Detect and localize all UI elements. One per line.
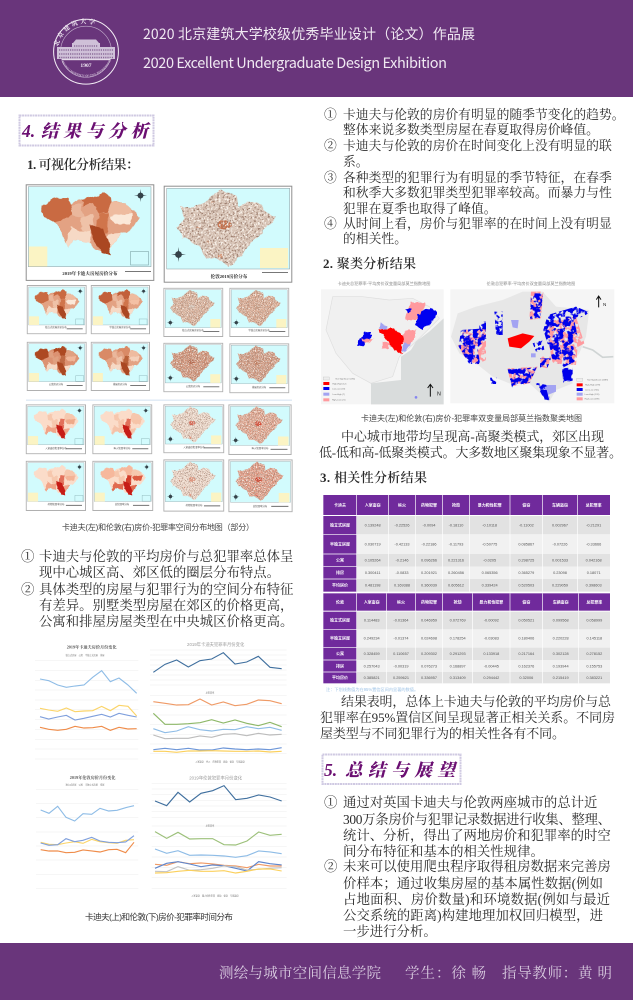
legend: London clusters xyxy=(577,378,608,401)
table: Cardiff correlation: 0.481198 xyxy=(365,584,381,588)
map grid: Cardiff crime rates xyxy=(26,405,153,510)
table: Cardiff correlation: 独立式房屋 xyxy=(330,521,350,527)
table: Cardiff correlation: 入室盗窃 xyxy=(365,501,381,507)
footer: advisor: 指导教师：黄 明 xyxy=(502,964,612,982)
table: London correlation: -0.01364 xyxy=(393,619,409,623)
table: London correlation: 入室盗窃 xyxy=(364,598,380,604)
text block: spatial findings: 有差异。别墅类型房屋在郊区的价格更高， xyxy=(39,597,293,614)
table: London correlation: 抢劫 xyxy=(454,598,462,604)
icon: north arrow xyxy=(596,296,606,307)
chart: London monthly house price: 独立式房屋 公寓 半独立式房屋 排屋 xyxy=(66,782,105,786)
table: London correlation: 0.099568 xyxy=(553,619,569,623)
table: London correlation: 总犯罪率 xyxy=(586,598,602,604)
legend: London clusters: High-High (199) xyxy=(585,385,601,387)
line charts: time distribution xyxy=(35,641,287,897)
table: London correlation: 车辆盗窃 xyxy=(553,598,569,604)
text block: temporal findings: 从时间上看，房价与犯罪率的在时间上没有明显 xyxy=(343,216,612,232)
table: London correlation: 0.133918 xyxy=(483,652,499,656)
table: London correlation: 0.217164 xyxy=(518,652,535,656)
table: London correlation: -0.00319 xyxy=(393,664,409,668)
text block: conclusion: 间分布特征和基本的相关性规律。 xyxy=(343,843,544,859)
text block: temporal findings: ④ xyxy=(324,217,337,231)
table: Cardiff correlation: 0.605612 xyxy=(448,584,464,588)
table: Cardiff correlation: 0.260456 xyxy=(448,571,464,575)
chart: Cardiff monthly crime rate xyxy=(150,641,287,763)
table: London correlation: 0.385821 xyxy=(364,676,380,680)
icon: north arrow: N xyxy=(603,302,606,307)
icon: north arrow: N xyxy=(437,391,441,397)
table: London correlation xyxy=(323,593,610,683)
table: London correlation: 0.076273 xyxy=(421,664,437,668)
map grid: Cardiff house prices by type: 半独立房屋房价分布 xyxy=(109,325,131,329)
table: London correlation: 半独立房屋 xyxy=(330,635,350,641)
table: London correlation: 0.215419 xyxy=(553,676,569,680)
text block: correlation findings: 屋类型与不同犯罪行为的相关性各有不同。 xyxy=(320,726,565,741)
table: London correlation: 偷窃 xyxy=(522,598,530,604)
icon: university seal: 1907 xyxy=(80,63,92,69)
table: Cardiff correlation: 公寓 xyxy=(336,557,344,563)
table: Cardiff correlation: 0.365279 xyxy=(518,571,534,575)
table: Cardiff correlation: 0.001533 xyxy=(552,559,568,563)
table: London correlation: 0.220228 xyxy=(553,637,569,641)
legend: Cardiff clusters: High-High (12) xyxy=(332,383,347,385)
table: Cardiff correlation: -0.50775 xyxy=(482,542,497,546)
table: London correlation: 0.259621 xyxy=(393,676,409,680)
legend: London clusters: Not Significant (3489) xyxy=(587,379,608,382)
text block: conclusion: 占地面积、房价数量)和环境数据(例如与最近 xyxy=(343,891,610,907)
table: London correlation: 0.180406 xyxy=(518,637,534,641)
icon: university seal xyxy=(53,18,119,85)
text block: conclusion: 统计、分析，得出了两地房价和犯罪率的时空 xyxy=(343,827,611,844)
table: London correlation: 0.249234 xyxy=(364,637,381,641)
legend: London clusters: High-Low (289) xyxy=(585,399,600,401)
text block: temporal findings: 犯罪在夏季也取得了峰值。 xyxy=(343,201,497,216)
text block: conclusion: 公交系统的距离)构建地理加权回归模型，进 xyxy=(343,907,603,924)
table: London correlation: 0.294442 xyxy=(483,676,499,680)
table: Cardiff correlation: -0.33666 xyxy=(586,542,601,546)
table: Cardiff correlation: 0.169388 xyxy=(394,584,410,588)
table: London correlation: 0.168897 xyxy=(450,664,466,668)
table: London correlation: 0.046959 xyxy=(421,619,437,623)
map grid: London crime rates: 入室盗窃犯罪率分布 xyxy=(183,445,205,449)
chart: London monthly crime rate xyxy=(152,774,287,897)
icon: university seal: 北京建筑大学 xyxy=(54,18,96,46)
legend: Cardiff clusters: High-Low (21) xyxy=(332,400,346,402)
table: London correlation: 0.257043 xyxy=(364,664,380,668)
map: Cardiff LISA clusters: 卡迪夫总犯罪率-平均房价双变量局部莫兰指数地图 xyxy=(338,280,430,286)
header title Chinese: 2020 北京建筑大学校级优秀毕业设计（论文）作品展 xyxy=(143,24,475,44)
text block: cluster findings: 低-低和高-低聚类模式。大多数地区聚集现象不显著。 xyxy=(319,445,622,460)
table: London correlation: 药物犯罪 xyxy=(421,598,437,604)
table: London correlation: 0.209302 xyxy=(421,652,437,656)
footer: student: 学生：徐 畅 xyxy=(405,965,486,982)
text block: spatial findings: 现中心城区高、郊区低的圈层分布特点。 xyxy=(39,564,280,580)
table: Cardiff correlation: 0.339424 xyxy=(482,584,499,588)
map grid: Cardiff crime rates: 纵火犯罪率分布 xyxy=(114,446,131,450)
subheading 2: 2. 聚类分析结果 xyxy=(323,256,416,271)
table: Cardiff correlation: -0.0205 xyxy=(483,559,496,563)
table: Cardiff correlation: -0.22526 xyxy=(394,523,410,527)
table: London correlation: 排房 xyxy=(336,662,344,668)
text block: temporal findings: ③ xyxy=(324,171,337,185)
map grid: Cardiff house prices by type: 独立式房屋房价分布 xyxy=(45,325,67,329)
cluster maps xyxy=(321,280,614,404)
table: London correlation: 0.336957 xyxy=(421,676,437,680)
section heading: 5 conclusion: 总结与展望 xyxy=(345,760,458,780)
text block: spatial findings: ② xyxy=(21,582,34,597)
subheading 3: 3. 相关性分析结果 xyxy=(320,470,427,485)
map grid: London crime rates: 纵火犯罪率分布 xyxy=(252,446,269,450)
text block: spatial findings xyxy=(21,548,294,629)
table: Cardiff correlation: 0.520503 xyxy=(518,584,534,588)
table: London correlation: 0.302128 xyxy=(553,652,569,656)
map grid: London crime rates: 总犯罪率分布 xyxy=(253,504,268,508)
text block: conclusion: ② xyxy=(324,859,337,874)
header title English: 2020 Excellent Undergraduate Design Exhibition xyxy=(143,52,447,73)
table: Cardiff correlation: 卡迪夫 xyxy=(334,501,346,507)
table: Cardiff correlation: 暴力和性犯罪 xyxy=(478,501,502,507)
text block: spatial findings: 具体类型的房屋与犯罪行为的空间分布特征 xyxy=(39,581,294,597)
table: Cardiff correlation: -0.42133 xyxy=(394,542,410,546)
table: Cardiff correlation: -0.11002 xyxy=(519,523,534,527)
table: Cardiff correlation: 0.298725 xyxy=(518,559,534,563)
table: Cardiff correlation: -0.0094 xyxy=(423,523,436,527)
map grid: London house prices by type: 独立式房屋房价分布 xyxy=(182,328,204,332)
map grid: Cardiff crime rates: 药物犯罪率分布 xyxy=(48,502,65,506)
text block: correlation findings xyxy=(320,694,615,741)
text block: temporal findings: ① xyxy=(324,108,337,122)
text block: temporal findings: 整体来说多数类型房屋在春夏取得房价峰值。 xyxy=(343,122,599,137)
table: London correlation: 0.278152 xyxy=(586,652,602,656)
section heading: 4 results: 4. xyxy=(21,121,35,141)
table: Cardiff correlation: -0.0833 xyxy=(396,571,408,575)
chart: London monthly crime rate: 入室盗窃 暴力和性犯罪 抢劫 偷窃 车辆盗窃 xyxy=(191,893,239,897)
table: Cardiff correlation: -0.18110 xyxy=(449,523,463,527)
table: London correlation: 平均房价 xyxy=(332,674,348,680)
map: London 2019 price xyxy=(164,186,292,282)
map grid: Cardiff house prices by type: 排屋房价分布 xyxy=(113,382,128,386)
table: Cardiff correlation: 0.229059 xyxy=(552,584,568,588)
table: Cardiff correlation: 0.065356 xyxy=(482,571,498,575)
map grid: London house prices by type: 排屋房价分布 xyxy=(252,385,267,389)
table: Cardiff correlation: -0.11793 xyxy=(449,542,463,546)
table: Cardiff correlation: 0.398603 xyxy=(586,584,602,588)
table: Cardiff correlation: -0.21291 xyxy=(586,523,601,527)
text block: temporal findings xyxy=(324,107,625,246)
table: Cardiff correlation: -0.07226 xyxy=(552,542,568,546)
table: London correlation: 0.024698 xyxy=(421,637,437,641)
legend: London clusters: Low-High (120) xyxy=(585,394,600,396)
chart: London monthly crime rate: 2019年伦敦犯罪率月份变化 xyxy=(189,774,243,781)
map: Cardiff LISA clusters xyxy=(321,280,444,404)
map grid: Cardiff crime rates: 总犯罪率分布 xyxy=(115,502,130,506)
table: Cardiff correlation: 车辆盗窃 xyxy=(552,501,568,507)
table: Cardiff correlation: -0.2146 xyxy=(396,559,408,563)
table: Cardiff correlation: 半独立房屋 xyxy=(330,540,350,546)
map grid: Cardiff house prices by type xyxy=(27,285,150,391)
table: Cardiff correlation: 总犯罪率 xyxy=(586,501,602,507)
section heading: 5 conclusion: 5. xyxy=(324,760,337,780)
table: London correlation: 公寓 xyxy=(336,650,344,656)
table: Cardiff correlation: 0.139248 xyxy=(365,523,381,527)
map grid: London crime rates: 药物犯罪率分布 xyxy=(186,503,203,507)
map grid: London house prices by type: 半独立房屋房价分布 xyxy=(248,328,270,332)
text block: temporal findings: 卡迪夫与伦敦的房价在时间变化上没有明显的联 xyxy=(343,138,612,153)
table: London correlation: 0.313409 xyxy=(450,676,466,680)
table: Cardiff correlation: 0.085867 xyxy=(518,542,534,546)
text block: temporal findings: ② xyxy=(324,139,337,153)
text block: correlation findings: 结果表明，总体上卡迪夫与伦敦的平均房价与总 xyxy=(341,694,612,710)
table: London correlation: 暴力和性犯罪 xyxy=(479,598,503,604)
table: London correlation: 0.050521 xyxy=(518,619,534,623)
text block: temporal findings: 系。 xyxy=(343,155,369,169)
table: Cardiff correlation: 纵火 xyxy=(398,501,406,507)
table note: 注：下划线数值为在95%置信区间内显著的数值。 xyxy=(326,686,418,693)
table: Cardiff correlation: 偷窃 xyxy=(522,501,530,507)
table: London correlation: 0.383221 xyxy=(586,676,602,680)
table: Cardiff correlation: 0.201921 xyxy=(421,571,437,575)
map grid: Cardiff house prices by type: 公寓房价分布 xyxy=(49,382,64,386)
text block: conclusion: 未来可以使用爬虫程序取得租房数据来完善房 xyxy=(343,858,611,874)
table: Cardiff correlation xyxy=(323,495,610,592)
map: London 2019 price: 伦敦2019房价分布 xyxy=(211,273,248,280)
table: London correlation: 0.110657 xyxy=(393,652,409,656)
table: Cardiff correlation: 0.030719 xyxy=(365,542,381,546)
map: London LISA clusters xyxy=(450,280,614,403)
table: London correlation: 纵火 xyxy=(397,598,405,604)
table: London correlation: -0.01374 xyxy=(393,637,409,641)
table: London correlation: 独立式房屋 xyxy=(330,617,350,623)
table: London correlation: 0.072769 xyxy=(450,619,466,623)
map grid: London house prices by type xyxy=(164,288,289,393)
legend: Cardiff clusters xyxy=(323,377,355,402)
table: London correlation: 0.155753 xyxy=(586,664,602,668)
text block: temporal findings: 和秋季大多数犯罪类型犯罪率较高。而暴力与性 xyxy=(343,185,612,200)
chart: Cardiff monthly house price xyxy=(35,644,138,759)
table: London correlation: 0.291293 xyxy=(450,652,466,656)
table: London correlation: 0.328459 xyxy=(364,652,380,656)
chart: London monthly crime rate: 总犯罪率 xyxy=(206,823,215,827)
legend: Cardiff clusters: Not Significant (194) xyxy=(336,377,355,380)
table: Cardiff correlation: 抢劫 xyxy=(452,501,460,507)
section heading: 4 results xyxy=(20,116,154,146)
text block: spatial findings: 卡迪夫与伦敦的平均房价与总犯罪率总体呈 xyxy=(39,548,293,564)
legend: London clusters: Low-Low (741) xyxy=(585,389,599,391)
section heading: 4 results: 结果与分析 xyxy=(41,121,152,141)
chart: London monthly house price: 2019年伦敦房价月份变化 xyxy=(70,774,116,780)
text block: cluster findings: 中心城市地带均呈现高-高聚类模式，郊区出现 xyxy=(341,429,604,445)
legend: Cardiff clusters: Low-Low (18) xyxy=(332,388,345,390)
text block: correlation findings: 犯罪率在95%置信区间呈现显著正相关关系。不同房 xyxy=(320,710,615,725)
text block: spatial findings: 公寓和排屋房屋类型在中央城区价格更高。 xyxy=(39,613,293,629)
legend: Cardiff clusters: Low-High (7) xyxy=(332,394,345,396)
table: Cardiff correlation: 平均房价 xyxy=(332,582,348,588)
chart: Cardiff monthly crime rate: 总犯罪率 xyxy=(206,691,215,695)
text block: cluster findings xyxy=(319,429,622,460)
text block: conclusion xyxy=(324,794,611,939)
table: Cardiff correlation: 0.300411 xyxy=(365,571,381,575)
table: London correlation: 0.145118 xyxy=(586,637,602,641)
text block: conclusion: 通过对英国卡迪夫与伦敦两座城市的总计近 xyxy=(343,794,597,810)
header banner xyxy=(0,0,633,97)
text block: temporal findings: 各种类型的犯罪行为有明显的季节特征，在春季 xyxy=(343,170,612,186)
table: Cardiff correlation: 0.096266 xyxy=(421,559,437,563)
footer banner xyxy=(0,943,633,1000)
map grid: Cardiff crime rates: 入室盗窃犯罪率分布 xyxy=(45,446,67,450)
table: Cardiff correlation: 0.23098 xyxy=(553,571,567,575)
table: Cardiff correlation: 0.002967 xyxy=(552,523,568,527)
table: London correlation: 0.058999 xyxy=(586,619,602,623)
table: London correlation: -0.03083 xyxy=(484,637,499,641)
subheading 1: 1. 可视化分析结果： xyxy=(27,157,139,172)
table: London correlation: 0.114483 xyxy=(364,619,380,623)
table: London correlation: 0.193944 xyxy=(553,664,570,668)
table: Cardiff correlation: 0.105264 xyxy=(365,559,382,563)
chart: Cardiff monthly house price: 独立式房屋 公寓 半独立式房屋 排屋 xyxy=(66,653,105,657)
text block: temporal findings: 卡迪夫与伦敦的房价有明显的随季节变化的趋势。 xyxy=(343,107,625,122)
chart: London monthly house price xyxy=(36,774,138,888)
table: London correlation: 0.32006 xyxy=(519,676,533,680)
map: London LISA clusters: 伦敦总犯罪率-平均房价双变量局部莫兰指数地图 xyxy=(487,280,575,286)
table: Cardiff correlation: -0.22186 xyxy=(421,542,437,546)
section heading: 5 conclusion xyxy=(322,754,460,784)
table: London correlation: 伦敦 xyxy=(336,598,344,604)
chart: Cardiff monthly house price: 2019年卡迪夫房价月份变化 xyxy=(67,644,117,650)
table: Cardiff correlation: 0.360039 xyxy=(421,584,437,588)
text block: spatial findings: ① xyxy=(21,549,34,564)
map: Cardiff 2019 price xyxy=(26,185,154,280)
text block: conclusion: 一步进行分析。 xyxy=(343,923,437,939)
text block: temporal findings: 的相关性。 xyxy=(343,231,407,246)
text block: conclusion: 300万条房价与犯罪记录数据进行收集、整理、 xyxy=(343,811,611,827)
chart: Cardiff monthly crime rate: 2019年卡迪夫犯罪率月份变化 xyxy=(187,641,245,648)
map grid: London crime rates xyxy=(164,405,292,512)
table: Cardiff correlation: 0.18071 xyxy=(587,571,601,575)
caption: spatial maps: 卡迪夫(左)和伦敦(右)房价-犯罪率空间分布地图（部分） xyxy=(62,522,254,532)
table: London correlation: 0.178254 xyxy=(450,637,467,641)
map grid: London house prices by type: 公寓房价分布 xyxy=(186,384,201,388)
table: London correlation: 0.162376 xyxy=(518,664,534,668)
caption: time charts: 卡迪夫(上)和伦敦(下)房价-犯罪率时间分布 xyxy=(85,911,233,922)
footer: school: 测绘与城市空间信息学院 xyxy=(219,964,382,982)
table: Cardiff correlation: 0.042168 xyxy=(586,559,602,563)
table: London correlation: -0.00445 xyxy=(484,664,499,668)
table: Cardiff correlation: 排房 xyxy=(336,569,344,575)
map: Cardiff 2019 price: 2019年卡迪夫房屋房价分布 xyxy=(62,270,118,277)
table: Cardiff correlation: 药物犯罪 xyxy=(421,501,437,507)
table: Cardiff correlation: 0.221316 xyxy=(448,559,464,563)
chart: Cardiff monthly crime rate: 入室盗窃 纵火 药物犯罪 抢劫 偷窃 车辆盗窃 xyxy=(195,759,245,763)
table: Cardiff correlation: -0.10118 xyxy=(482,523,497,527)
caption: cluster maps: 卡迪夫(左)和伦敦(右)房价-犯罪率双变量局部莫兰指数聚类地图 xyxy=(361,413,582,423)
text block: conclusion: ① xyxy=(324,795,337,810)
text block: conclusion: 价样本；通过收集房屋的基本属性数据(例如 xyxy=(343,875,603,891)
table: London correlation: -0.00092 xyxy=(484,619,499,623)
